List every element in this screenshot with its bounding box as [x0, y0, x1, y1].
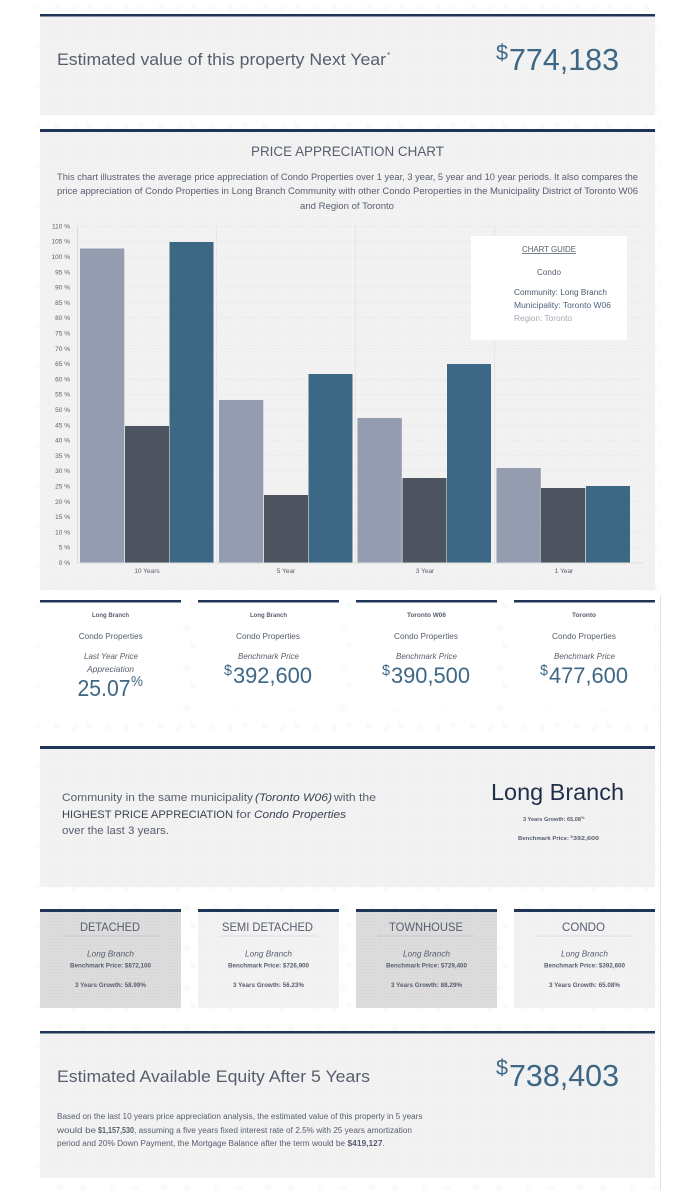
card: townhouse: Benchmark Price: $729,400 [386, 962, 467, 970]
x axis labels: 10 Years [134, 568, 160, 575]
x axis labels [134, 568, 574, 575]
y axis labels: 100 % [52, 254, 70, 261]
bars: 1 year [496, 468, 630, 562]
y axis labels: 25 % [55, 484, 70, 490]
panel: highest appreciation community [40, 746, 655, 887]
description text: Community in the same municipality [62, 792, 254, 804]
card: toronto benchmark: Benchmark Price [554, 651, 615, 661]
card: long branch benchmark: Benchmark Price [238, 651, 299, 661]
card: toronto benchmark: 477,600 [549, 663, 628, 688]
equity explanation text: period and 20% Down Payment, the Mortgage Balance after the term would be [57, 1139, 346, 1148]
card: last year appreciation: % [131, 673, 143, 690]
card: condo: Benchmark Price: $392,600 [544, 962, 625, 970]
y axis labels: 60 % [55, 376, 70, 383]
card: detached: Long Branch [87, 948, 134, 958]
value: 774,183: $ [496, 40, 508, 65]
chart guide legend: Condo [537, 268, 562, 277]
equity explanation text [56, 1112, 422, 1148]
card: long branch benchmark: 392,600 [233, 663, 312, 688]
y axis labels: 55 % [55, 392, 70, 399]
bars: 3 year [358, 364, 491, 562]
value: 738,403: $ [496, 1055, 508, 1080]
bars: 10 years [80, 242, 214, 562]
y axis labels: 40 % [55, 438, 70, 445]
card: condo [514, 909, 655, 1008]
card: toronto benchmark [514, 600, 655, 710]
y axis labels: 85 % [55, 300, 70, 307]
chart description: price appreciation of Condo Properties in Long Branch Community with other Condo Peroperties in the Municipality District of Toronto W06 [57, 186, 638, 196]
card: toronto w06 benchmark: Toronto W06 [407, 613, 447, 619]
equity explanation text: Based on the last 10 years price appreciation analysis, the estimated value of this property in 5 years [57, 1112, 422, 1121]
community name: Long Branch [491, 779, 624, 805]
card: semi detached: Long Branch [245, 948, 292, 958]
card: townhouse: Long Branch [403, 948, 450, 958]
community stats: 3 Years Growth: 65.08 [523, 817, 581, 823]
card: condo: Long Branch [561, 948, 608, 958]
chart description [57, 172, 638, 211]
description text: (Toronto W06) [255, 792, 332, 804]
chart heading: PRICE APPRECIATION CHART [251, 144, 444, 159]
community stats: % [581, 815, 585, 820]
y axis labels: 90 % [55, 285, 70, 292]
stat cards row [40, 600, 655, 722]
card: detached [40, 909, 181, 1008]
x axis labels: 1 Year [555, 568, 574, 575]
description text [62, 792, 376, 837]
community stats [518, 815, 599, 842]
description text: HIGHEST PRICE APPRECIATION [62, 809, 233, 821]
chart guide legend: CHART GUIDE [522, 245, 576, 254]
equity explanation text: $1,157,530 [98, 1126, 134, 1135]
y axis labels: 30 % [55, 468, 70, 475]
card: toronto benchmark: Toronto [572, 613, 596, 619]
heading: available equity: Estimated Available Equity After 5 Years [57, 1067, 370, 1086]
y axis labels: 20 % [55, 499, 70, 506]
card: toronto benchmark: $ [540, 662, 549, 679]
card: toronto w06 benchmark: $ [382, 662, 391, 679]
x axis labels: 3 Year [416, 568, 435, 575]
chart guide legend [471, 236, 627, 340]
panel: price appreciation chart [40, 129, 655, 590]
y axis labels: 80 % [55, 315, 70, 322]
card: toronto w06 benchmark: 390,500 [391, 663, 470, 688]
card: semi detached: SEMI DETACHED [222, 920, 313, 934]
panel: estimated value next year [40, 14, 655, 115]
chart guide legend: Municipality: Toronto W06 [514, 301, 612, 310]
card: last year appreciation: 25.07 [78, 675, 130, 701]
card: long branch benchmark: Condo Properties [236, 631, 300, 641]
card: detached: 3 Years Growth: 58.99% [75, 982, 146, 989]
y axis labels: 45 % [55, 422, 70, 429]
card: last year appreciation: Last Year Price [84, 651, 138, 661]
description text: Condo Properties [254, 809, 347, 821]
x axis labels: 5 Year [277, 568, 296, 575]
card: semi detached [198, 909, 339, 1008]
community stats: 392,600 [573, 836, 599, 842]
card: townhouse [356, 909, 497, 1008]
equity explanation text: would be [56, 1126, 97, 1135]
community stats: Benchmark Price: [518, 836, 569, 842]
y axis labels: 50 % [55, 407, 70, 414]
description text: over the last 3 years. [62, 825, 169, 837]
equity explanation text: . [382, 1139, 385, 1148]
chart description: and Region of Toronto [300, 201, 394, 211]
y axis labels: 75 % [55, 330, 70, 338]
panel: estimated equity [40, 1031, 655, 1178]
y axis labels: 10 % [55, 529, 70, 536]
heading: estimated value: Estimated value of this property Next Year [57, 50, 386, 69]
card: condo: 3 Years Growth: 65.08% [549, 982, 620, 989]
card: last year appreciation: Appreciation [86, 664, 134, 674]
equity explanation text: , assuming a five years fixed interest rate of 2.5% with 25 years amortization [134, 1126, 412, 1135]
card: last year appreciation [40, 600, 181, 722]
card: toronto w06 benchmark: Condo Properties [394, 631, 458, 641]
y axis labels: 15 % [55, 514, 70, 521]
y axis labels: 65 % [55, 361, 70, 368]
community stats: $ [570, 834, 574, 839]
card: townhouse: 3 Years Growth: 88.29% [391, 982, 462, 989]
card: townhouse: TOWNHOUSE [389, 920, 463, 934]
chart description: This chart illustrates the average price appreciation of Condo Properties over 1 year, 3 year, 5 year and 10 year periods. It also compares the [57, 172, 638, 182]
value: 774,183: 774,183 [509, 42, 619, 77]
card: last year appreciation: Long Branch [92, 613, 129, 619]
description text: with the [333, 792, 376, 804]
y axis labels: 0 % [59, 560, 70, 567]
y axis labels: 95 % [55, 269, 70, 276]
card: long branch benchmark [198, 600, 339, 710]
y axis labels [52, 224, 70, 567]
card: condo: CONDO [562, 920, 605, 934]
card: toronto w06 benchmark: Benchmark Price [396, 651, 457, 661]
card: semi detached: 3 Years Growth: 56.23% [233, 982, 304, 989]
card: detached: DETACHED [80, 920, 140, 934]
value: 738,403: 738,403 [509, 1058, 619, 1093]
card: long branch benchmark: $ [224, 662, 233, 679]
bar chart [52, 224, 643, 575]
description text: for [236, 809, 251, 821]
card: detached: Benchmark Price: $872,100 [70, 962, 151, 970]
chart guide legend: Community: Long Branch [514, 288, 607, 297]
card: toronto benchmark: Condo Properties [552, 631, 616, 641]
property type cards row [40, 909, 655, 1008]
card: long branch benchmark: Long Branch [250, 613, 287, 619]
chart guide legend: Region: Toronto [514, 314, 573, 323]
y axis labels: 110 % [52, 224, 70, 230]
y axis labels: 5 % [59, 545, 70, 552]
y axis labels: 70 % [55, 346, 70, 353]
y axis labels: 105 % [52, 239, 70, 246]
footnote asterisk: * [387, 51, 390, 60]
equity explanation text: $419,127 [348, 1139, 383, 1148]
card: toronto w06 benchmark [356, 600, 497, 710]
y axis labels: 35 % [55, 453, 70, 460]
card: last year appreciation: Condo Properties [79, 631, 143, 641]
bars: 5 year [219, 374, 352, 562]
card: semi detached: Benchmark Price: $726,900 [228, 962, 309, 970]
